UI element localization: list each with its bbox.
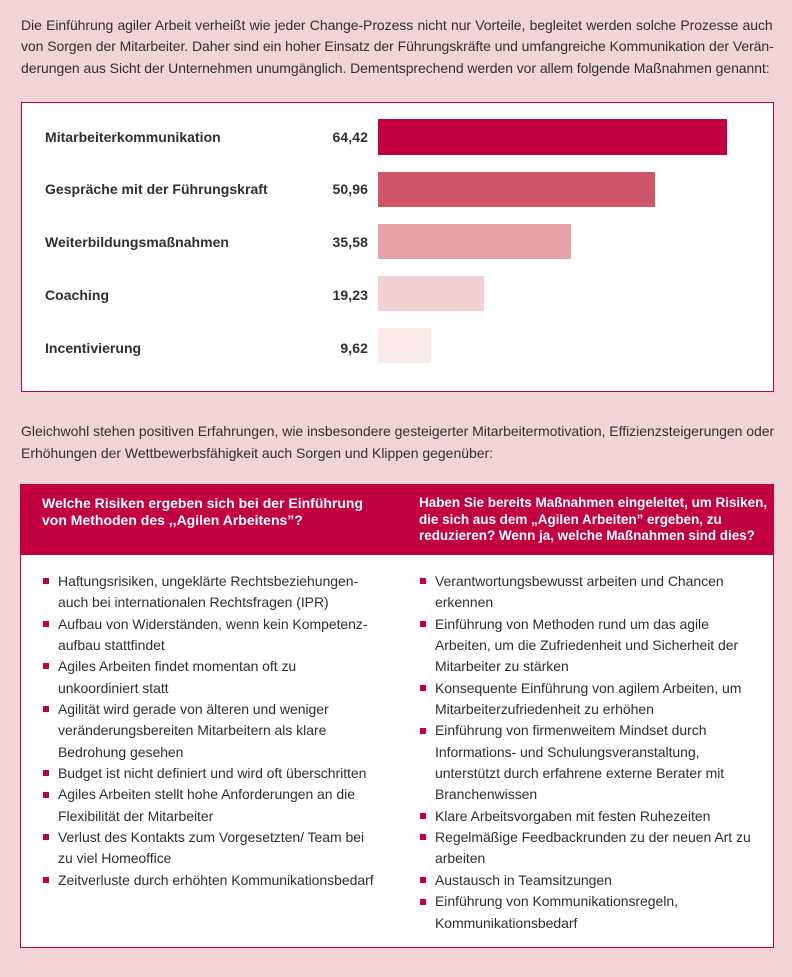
measures text: Einführung von Methoden rund um das agile: [435, 616, 709, 632]
risks text: Agiles Arbeiten findet momentan oft zu: [58, 658, 296, 674]
risks text: Zeitverluste durch erhöhten Kommunikationsbedarf: [58, 872, 374, 888]
risks text: zu viel Homeoffice: [58, 850, 171, 866]
heading: measures: reduzieren? Wenn ja, welche Maßnahmen sind dies?: [419, 528, 755, 543]
bar chart: [45, 119, 727, 363]
measures text: Branchenwissen: [435, 786, 537, 802]
measures text: Einführung von Kommunikationsregeln,: [435, 893, 678, 909]
measures text: Arbeiten, um die Zufriedenheit und Sicherheit der: [435, 637, 738, 653]
measures text: Verantwortungsbewusst arbeiten und Chancen: [435, 573, 724, 589]
bar 9,62: [378, 328, 431, 363]
bullet: [420, 621, 426, 627]
risks text: Bedrohung gesehen: [58, 744, 183, 760]
intro paragraph: von Sorgen der Mitarbeiter. Daher sind ein hoher Einsatz der Führungskräfte und umfangreiche Kommunikation der Verän-: [21, 38, 774, 54]
row: Weiterbildungsmaßnahmen: Weiterbildungsmaßnahmen: [45, 234, 229, 250]
panel: bar chart: [21, 102, 774, 392]
measures text: Mitarbeiterzufriedenheit zu erhöhen: [435, 701, 654, 717]
bar 64,42: [378, 119, 727, 155]
measures text: Konsequente Einführung von agilem Arbeiten, um: [435, 680, 741, 696]
risks text: Agilität wird gerade von älteren und weniger: [58, 701, 329, 717]
heading: risks: [42, 495, 363, 528]
bullet: [43, 770, 49, 776]
value 64,42: 64,42: [332, 129, 368, 145]
second paragraph: Erhöhungen der Wettbewerbsfähigkeit auch Sorgen und Klippen gegenüber:: [21, 445, 493, 461]
heading: measures: die sich aus dem „Agilen Arbeiten” ergeben, zu: [419, 512, 722, 526]
measures text: unterstützt durch erfahrene externe Berater mit: [435, 765, 724, 781]
bullet: [420, 834, 426, 840]
risks text: [58, 573, 374, 888]
measures text: Klare Arbeitsvorgaben mit festen Ruhezeiten: [435, 808, 710, 824]
intro paragraph: Die Einführung agiler Arbeit verheißt wie jeder Change-Prozess nicht nur Vorteile, begleitet werden solche Prozesse auch: [21, 17, 773, 33]
row: Mitarbeiterkommunikation: Mitarbeiterkommunikation: [45, 129, 221, 145]
measures text: [435, 573, 751, 930]
bullet: [43, 706, 49, 712]
bullet: [420, 877, 426, 883]
panel: risks and measures table: [20, 484, 774, 948]
row: Coaching: Coaching: [45, 287, 109, 303]
bar 50,96: [378, 172, 655, 207]
risks text: Verlust des Kontakts zum Vorgesetzten/ Team bei: [58, 829, 364, 845]
measures text: Einführung von firmenweitem Mindset durch: [435, 722, 706, 738]
bullet: [43, 578, 49, 584]
risks text: unkoordiniert statt: [58, 680, 169, 696]
value 9,62: 9,62: [340, 340, 368, 356]
value 35,58: 35,58: [332, 234, 368, 250]
second paragraph: Gleichwohl stehen positiven Erfahrungen, wie insbesondere gesteigerter Mitarbeitermotivation, Effizienzsteigerungen oder: [21, 423, 774, 439]
table header band: [20, 484, 774, 555]
measures text: Kommunikationsbedarf: [435, 914, 577, 930]
bullet: [420, 578, 426, 584]
measures text: erkennen: [435, 594, 493, 610]
value 50,96: 50,96: [332, 181, 368, 197]
bullet: [43, 877, 49, 883]
bullet: [420, 685, 426, 691]
bullet: [420, 813, 426, 819]
risks text: veränderungsbereiten Mitarbeitern als klare: [58, 722, 326, 738]
risks text: Haftungsrisiken, ungeklärte Rechtsbeziehungen-: [58, 573, 358, 589]
measures text: Mitarbeiter zu stärken: [435, 658, 569, 674]
bullet: [43, 792, 49, 798]
risks text: Agiles Arbeiten stellt hohe Anforderungen an die: [58, 786, 355, 802]
bullet: [43, 663, 49, 669]
measures text: Regelmäßige Feedbackrunden zu der neuen Art zu: [435, 829, 751, 845]
heading: risks: Welche Risiken ergeben sich bei der Einführung: [42, 495, 363, 511]
measures text: arbeiten: [435, 850, 485, 866]
heading: risks: von Methoden des ,,Agilen Arbeitens”?: [42, 512, 303, 528]
bar 35,58: [378, 224, 571, 259]
risks text: auch bei internationalen Rechtsfragen (IPR): [58, 594, 329, 610]
risks text: Budget ist nicht definiert und wird oft überschritten: [58, 765, 366, 781]
list: measures: [420, 573, 751, 930]
bar 19,23: [378, 276, 484, 311]
risks text: Flexibilität der Mitarbeiter: [58, 808, 213, 824]
risks text: aufbau stattfindet: [58, 637, 165, 653]
value 19,23: 19,23: [332, 287, 368, 303]
second paragraph: [21, 423, 774, 461]
row: Gespräche: Gespräche mit der Führungskraft: [45, 181, 268, 197]
bullet: [420, 899, 426, 905]
measures text: Informations- und Schulungsveranstaltung,: [435, 744, 700, 760]
risks text: Aufbau von Widerständen, wenn kein Kompetenz-: [58, 616, 368, 632]
bullet: [43, 834, 49, 840]
bullet: [43, 621, 49, 627]
measures text: Austausch in Teamsitzungen: [435, 872, 612, 888]
heading: measures: Haben Sie bereits Maßnahmen eingeleitet, um Risiken,: [419, 495, 767, 510]
row: Incentivierung: Incentivierung: [45, 340, 141, 356]
list: risks: [43, 573, 374, 888]
intro paragraph: derungen aus Sicht der Unternehmen unumgänglich. Dementsprechend werden vor allem folgende Maßnahmen genannt:: [21, 60, 770, 76]
bullet: [420, 728, 426, 734]
heading: measures: [419, 495, 767, 543]
intro paragraph: [21, 17, 774, 76]
